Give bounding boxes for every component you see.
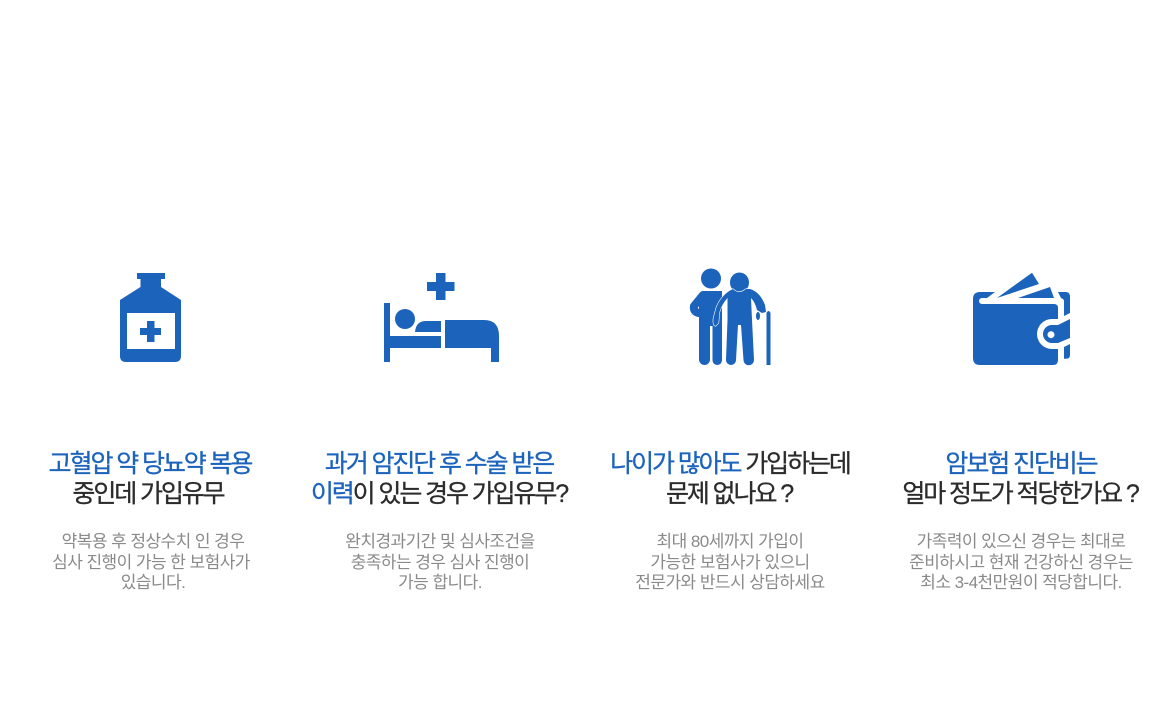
heading line 2: cancer history: 이력이 있는 경우 가입유무? (311, 480, 567, 508)
panel: coverage amount (902, 450, 1139, 592)
text block: age line 3: 전문가와 반드시 상담하세요 (635, 573, 825, 592)
text block: coverage amount line 3: 최소 3-4천만원이 적당합니다. (920, 573, 1122, 592)
heading line 2: coverage amount: 얼마 정도가 적당한가요 ? (902, 480, 1138, 508)
text block: age line 2: 가능한 보험사가 있으니 (650, 553, 810, 572)
text block: medication line 2: 심사 진행이 가능 한 보험사가 (52, 553, 250, 572)
panel: medication (49, 450, 252, 592)
icon: elderly couple with cane (694, 268, 770, 365)
text block: medication line 1: 약복용 후 정상수치 인 경우 (62, 532, 244, 551)
icon: medicine bottle (120, 273, 181, 362)
text block: cancer history line 1: 완치경과기간 및 심사조건을 (345, 532, 535, 551)
icon: hospital bed (384, 273, 499, 362)
heading: coverage amount: 암보험 진단비는 (945, 450, 1097, 478)
panel: age (610, 450, 850, 592)
text block: cancer history line 3: 가능 합니다. (398, 573, 482, 592)
text block: coverage amount line 1: 가족력이 있으신 경우는 최대로 (917, 532, 1125, 551)
text block: cancer history line 2: 충족하는 경우 심사 진행이 (351, 553, 529, 572)
text block: coverage amount line 2: 준비하시고 현재 건강하신 경우는 (909, 553, 1133, 572)
heading: cancer history: 과거 암진단 후 수술 받은 (325, 450, 553, 478)
heading: age: 나이가 많아도 가입하는데 (610, 450, 850, 478)
panel: cancer history (311, 450, 568, 592)
icon: wallet with banknotes (973, 273, 1070, 365)
text block: age line 1: 최대 80세까지 가입이 (657, 532, 803, 551)
heading line 2: age: 문제 없나요 ? (666, 480, 792, 508)
heading: medication: 고혈압 약 당뇨약 복용 (49, 450, 251, 478)
text block: medication line 3: 있습니다. (121, 573, 185, 592)
heading line 2: medication: 중인데 가입유무 (72, 480, 224, 508)
